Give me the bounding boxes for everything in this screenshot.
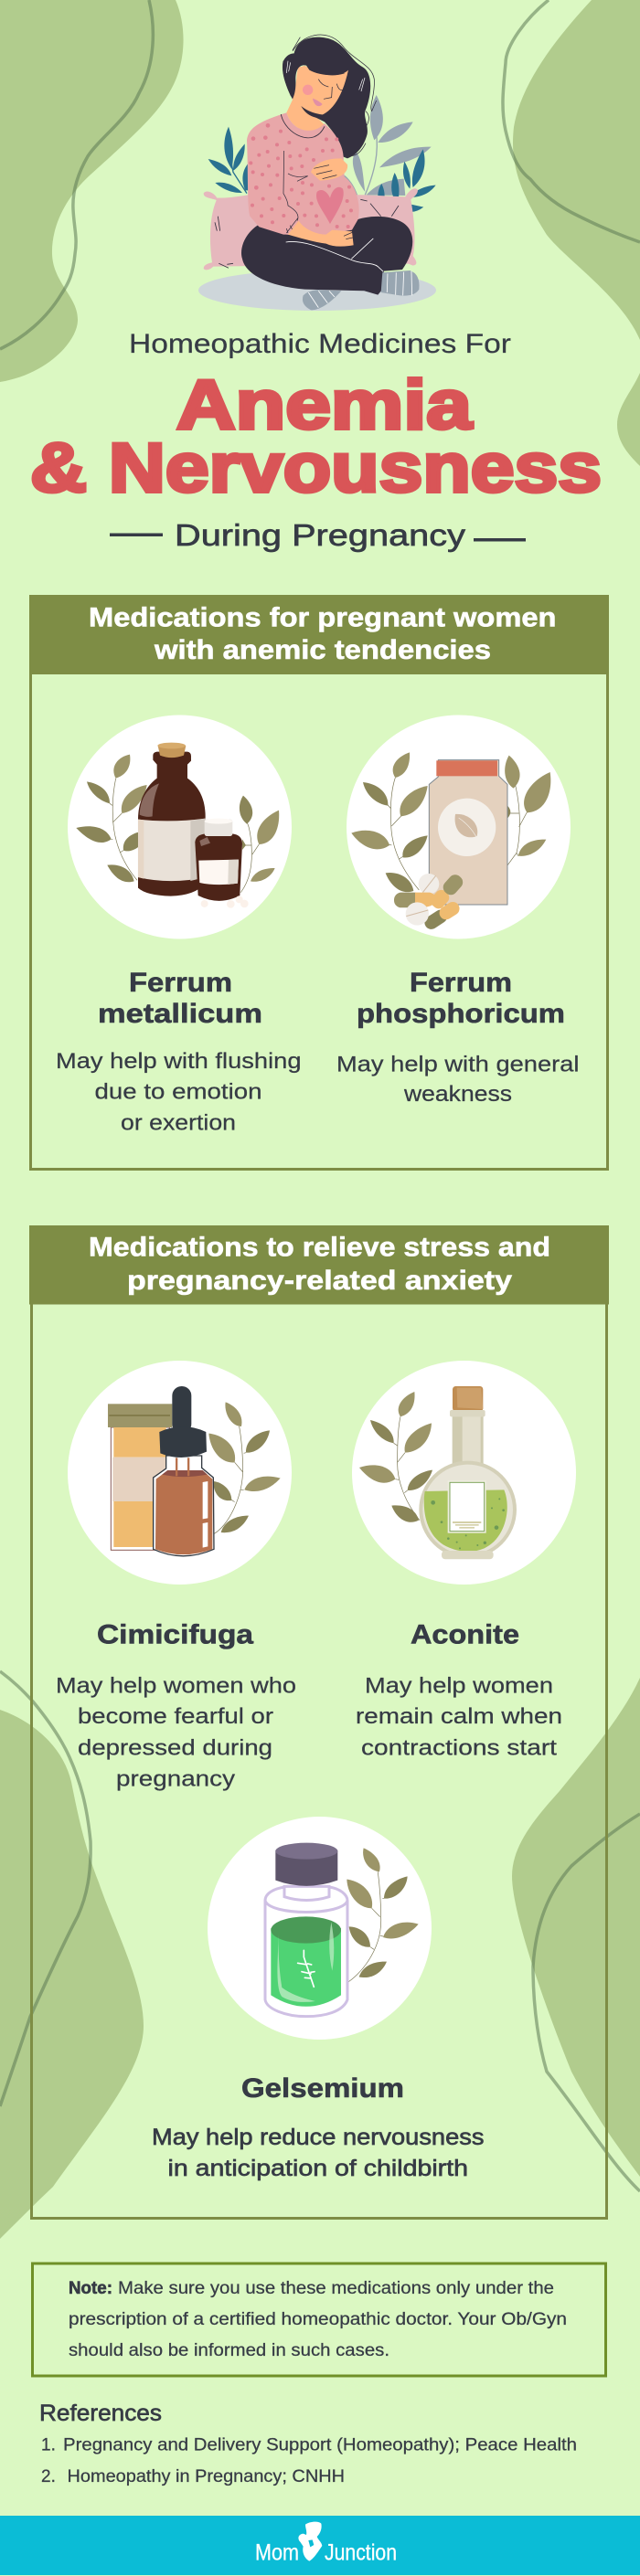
medication: Ferrum metallicum: May help with flushing	[56, 1049, 302, 1074]
title: Anemia: Anemia	[176, 366, 473, 444]
medication: Cimicifuga	[56, 1620, 296, 1791]
medication: Ferrum phosphoricum: weakness	[403, 1082, 512, 1107]
panel: medications to relieve stress and anxiety	[29, 1225, 609, 2219]
references: Pregnancy and Delivery Support (Homeopathy); Peace Health	[63, 2436, 577, 2455]
footer bar with MomJunction logo: Mom	[255, 2540, 299, 2566]
medication: Gelsemium: Gelsemium	[241, 2073, 404, 2104]
subtitle: Homeopathic Medicines For: Homeopathic Medicines For	[129, 329, 511, 359]
panel header: with anemic tendencies	[154, 635, 491, 665]
medication: Ferrum phosphoricum: phosphoricum	[357, 999, 565, 1029]
panel header	[29, 1225, 609, 1305]
medication: Aconite	[356, 1620, 562, 1761]
references: 2.	[41, 2467, 56, 2486]
medication: Cimicifuga: Cimicifuga	[97, 1620, 253, 1650]
medication: Ferrum phosphoricum: Ferrum	[410, 968, 512, 998]
medication: Ferrum phosphoricum: May help with general	[336, 1052, 580, 1076]
medication: Gelsemium	[152, 2073, 485, 2181]
medication: Ferrum phosphoricum	[336, 968, 580, 1107]
medication: Cimicifuga: pregnancy	[116, 1766, 236, 1791]
icon: supplement jar with capsules	[347, 715, 571, 939]
icon: round flask with green liquid	[352, 1361, 576, 1585]
icon: brown bottles with leaves	[68, 715, 292, 939]
references: Homeopathy in Pregnancy; CNHH	[68, 2467, 345, 2486]
medication: Ferrum metallicum: or exertion	[121, 1110, 236, 1135]
callout: note	[33, 2263, 605, 2376]
medication: Cimicifuga: May help women who	[56, 1674, 296, 1698]
medication: Ferrum metallicum: due to emotion	[95, 1080, 261, 1105]
medication: Aconite: Aconite	[411, 1620, 519, 1650]
callout: note: prescription of a certified homeopathic doctor. Your Ob/Gyn	[69, 2310, 567, 2329]
medication: Ferrum metallicum	[56, 968, 302, 1135]
panel header: pregnancy-related anxiety	[127, 1266, 513, 1296]
references: 1.	[41, 2436, 56, 2455]
subtitle: During Pregnancy with side rules	[110, 518, 526, 552]
medication: Gelsemium: May help reduce nervousness	[152, 2125, 485, 2150]
medication: Ferrum metallicum: Ferrum	[129, 968, 232, 998]
callout: note: should also be informed in such cases.	[69, 2341, 389, 2360]
illustration: pregnant woman sitting on a cushion	[198, 35, 436, 311]
callout: note: Make sure you use these medications only under the	[118, 2279, 554, 2298]
icon: jar with green tincture	[208, 1817, 432, 2040]
medication: Gelsemium: in anticipation of childbirth	[168, 2156, 468, 2181]
panel header: Medications for pregnant women	[89, 603, 556, 632]
panel header	[29, 595, 609, 674]
title block	[30, 329, 602, 552]
references: References	[39, 2401, 162, 2426]
medication: Aconite: remain calm when	[356, 1704, 562, 1729]
medication: Aconite: contractions start	[361, 1736, 557, 1761]
footer bar with MomJunction logo: Junction	[325, 2540, 397, 2566]
medication: Ferrum metallicum: metallicum	[98, 999, 262, 1029]
icon: dropper bottle and box	[68, 1361, 292, 1585]
medication: Aconite: May help women	[365, 1674, 553, 1698]
logo mark	[298, 2522, 322, 2561]
medication: Cimicifuga: become fearful or	[78, 1704, 273, 1729]
subtitle: During Pregnancy with side rules: During Pregnancy	[175, 518, 466, 552]
panel: medications for anemic tendencies	[29, 595, 609, 1170]
title: & Nervousness: & Nervousness	[30, 429, 602, 507]
references	[39, 2401, 577, 2486]
callout: note: Note:	[69, 2279, 112, 2298]
panel header: Medications to relieve stress and	[89, 1233, 550, 1263]
footer bar with MomJunction logo	[0, 2516, 640, 2575]
medication: Cimicifuga: depressed during	[78, 1736, 272, 1761]
